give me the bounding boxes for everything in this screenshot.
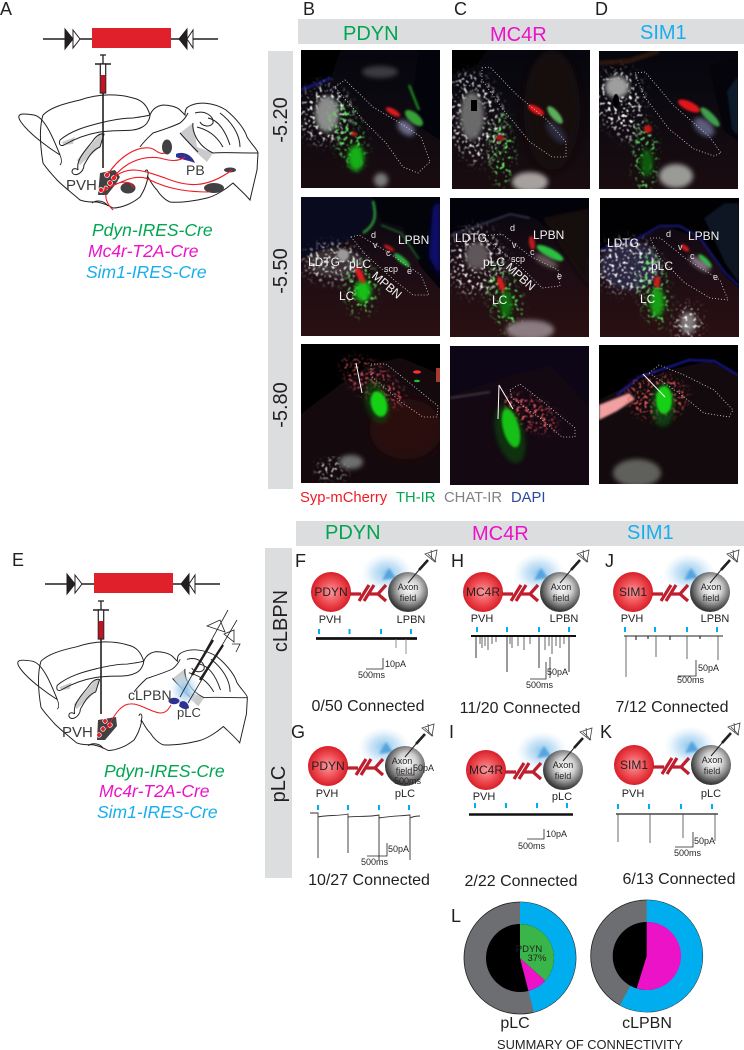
donut chart pLC	[464, 902, 576, 1014]
labels D -5.50: c	[690, 251, 695, 261]
legend: stain colours: TH-IR	[396, 490, 435, 506]
legend: stain colours: DAPI	[511, 490, 546, 506]
circuit labels I: pLC	[552, 791, 572, 803]
letter I: I	[449, 722, 454, 742]
scale bar I: 10pA	[546, 829, 567, 839]
trace F	[316, 637, 417, 640]
result K: 6/13 Connected	[623, 871, 735, 888]
labels B -5.50: e	[407, 266, 412, 276]
labels B -5.50: MPBN	[369, 269, 405, 302]
micrograph B -5.80	[301, 344, 440, 483]
panel J	[605, 550, 739, 716]
circuit labels G: Axon	[392, 756, 412, 766]
labels B -5.50: LC	[339, 289, 355, 303]
panel H	[451, 550, 589, 717]
side bar with target regions: cLBPN	[270, 590, 292, 652]
scale bar J	[677, 660, 719, 685]
icon: viral cassette E	[45, 573, 220, 594]
circuit labels I: field	[555, 771, 571, 781]
labels C -5.50: LDTG	[455, 231, 487, 245]
labels C -5.50: d	[510, 223, 515, 233]
trace J	[624, 636, 723, 640]
scale bar J: 50pA	[698, 663, 719, 673]
scale bar K: 50pA	[694, 836, 715, 846]
side bar with bregma levels: -5.80	[270, 382, 292, 428]
light pulses K	[617, 804, 713, 809]
result J: 7/12 Connected	[616, 699, 728, 716]
genotypes A: Sim1-IRES-Cre	[86, 262, 207, 282]
header bar top: MC4R	[490, 24, 547, 46]
labels B -5.50: scp	[384, 264, 398, 274]
header bar bottom: SIM1	[627, 522, 674, 544]
letter K: K	[600, 722, 612, 742]
circuit diagram K	[614, 723, 740, 785]
micrograph D -5.50	[596, 198, 739, 341]
panel K	[600, 722, 740, 888]
result G: 10/27 Connected	[308, 872, 430, 889]
trace H	[471, 636, 576, 672]
micrograph D -5.80	[599, 345, 738, 484]
scale bar I: 500ms	[518, 841, 546, 851]
circuit labels F: PVH	[319, 614, 341, 626]
circuit labels I: MC4R	[469, 763, 503, 777]
scale bar I	[518, 829, 567, 851]
header bar top	[298, 19, 744, 46]
donut labels: pLC	[500, 1015, 530, 1032]
blue light glow E	[170, 673, 200, 707]
header bar top: PDYN	[343, 23, 399, 45]
legend: stain colours: Syp-mCherry	[300, 490, 388, 506]
circuit labels H: MC4R	[466, 585, 500, 599]
circuit labels G: 500ms	[394, 776, 422, 786]
labels C -5.50: v	[512, 240, 517, 250]
labels B -5.50: d	[371, 230, 376, 240]
labels B -5.50: pLC	[349, 257, 371, 271]
scale bar G	[361, 843, 409, 867]
letter L: L	[451, 906, 461, 926]
panel: A viral injection schematic	[0, 0, 258, 282]
light pulses H	[476, 627, 570, 632]
circuit labels J	[619, 582, 729, 625]
header bar bottom: MC4R	[472, 523, 529, 545]
labels E: cLPBN	[128, 687, 172, 703]
circuit diagram G	[308, 724, 434, 786]
circuit labels J: PVH	[621, 613, 643, 625]
labels E: PVH	[62, 724, 93, 741]
icon: syringe E	[93, 601, 109, 714]
donut chart pLC: PDYN	[516, 944, 542, 955]
circuit labels G: PDYN	[311, 759, 345, 773]
scale bar J: 500ms	[677, 675, 705, 685]
scale bar K: 500ms	[674, 848, 702, 858]
trace K	[616, 813, 718, 815]
labels D -5.50: LC	[640, 292, 656, 306]
panel I	[449, 722, 592, 890]
circuit labels H: LPBN	[550, 613, 578, 625]
side bar with bregma levels: -5.50	[270, 248, 292, 294]
labels D -5.50	[607, 229, 719, 306]
labels D -5.50: d	[666, 229, 671, 239]
header letters B C D	[303, 0, 608, 19]
labels D -5.50: pLC	[651, 259, 673, 273]
circuit labels K: Axon	[702, 755, 722, 765]
circuit labels G: pLC	[395, 788, 415, 800]
trace G	[310, 813, 420, 860]
labels B -5.50: LDTG	[308, 255, 340, 269]
micrograph D -5.20	[599, 51, 738, 189]
genotypes E: Mc4r-T2A-Cre	[99, 781, 210, 801]
light pulses G	[317, 805, 410, 810]
circuit diagram J	[613, 550, 739, 612]
donut labels	[500, 1015, 672, 1032]
axons A	[103, 148, 232, 210]
label PB: PB	[186, 162, 205, 178]
icon: syringe A	[95, 55, 111, 168]
circuit diagram F	[311, 550, 437, 612]
circuit labels F: LPBN	[397, 614, 425, 626]
cLPBN and pLC nuclei	[168, 698, 189, 709]
labels C -5.50: e	[557, 271, 562, 281]
legend: stain colours: CHAT-IR	[444, 490, 502, 506]
header bar bottom	[296, 521, 744, 546]
circuit labels J: Axon	[701, 582, 721, 592]
letter G: G	[291, 722, 305, 742]
circuit labels H: field	[553, 593, 569, 603]
circuit labels F: field	[400, 593, 416, 603]
label PVH A: PVH	[66, 177, 97, 194]
scale bar H	[526, 657, 568, 690]
panel G	[291, 722, 434, 889]
circuit labels F: Axon	[398, 582, 418, 592]
donut labels: cLPBN	[622, 1015, 672, 1032]
icon: viral cassette A	[43, 28, 218, 49]
scale bar H: 50pA	[547, 667, 568, 677]
micrograph C -5.80	[450, 346, 589, 485]
target nuclei A	[120, 140, 236, 194]
labels E	[62, 687, 201, 741]
axon E	[106, 704, 171, 729]
circuit labels K: field	[704, 766, 720, 776]
circuit labels H: Axon	[551, 582, 571, 592]
mouse brain sagittal E	[18, 642, 247, 750]
genotypes E	[97, 761, 225, 822]
circuit labels G: 50pA	[413, 763, 434, 773]
scale bar F: 500ms	[358, 670, 386, 680]
circuit labels K	[620, 755, 722, 800]
circuit labels K: SIM1	[620, 758, 648, 772]
scale bar F	[358, 658, 406, 680]
circuit labels J: LPBN	[701, 613, 729, 625]
circuit labels H	[466, 582, 578, 625]
PVH nucleus A	[98, 170, 120, 195]
circuit labels G: PVH	[316, 788, 338, 800]
recording pipettes	[180, 610, 240, 703]
genotypes A: Mc4r-T2A-Cre	[88, 241, 199, 261]
micrograph B -5.50	[301, 197, 440, 336]
result F: 0/50 Connected	[312, 698, 424, 715]
circuit labels I	[469, 760, 573, 803]
panel: E recording schematic	[12, 550, 247, 822]
labels B -5.50: c	[386, 248, 391, 258]
genotypes A	[86, 220, 213, 282]
side bar with bregma levels: -5.20	[270, 97, 292, 143]
scale bar K	[674, 832, 715, 858]
labels C -5.50: MPBN	[503, 260, 538, 293]
side bar with target regions: pLC	[268, 766, 290, 802]
side bar with target regions	[265, 548, 292, 878]
micrograph C -5.20	[452, 50, 590, 189]
labels D -5.50: e	[713, 272, 718, 282]
circuit labels H: PVH	[471, 613, 493, 625]
labels B -5.50: LPBN	[398, 233, 429, 247]
micrograph C -5.50	[449, 198, 589, 340]
genotypes A: Pdyn-IRES-Cre	[92, 220, 213, 240]
header bar top: SIM1	[640, 22, 687, 44]
labels C -5.50: LPBN	[533, 228, 564, 242]
circuit labels F	[314, 582, 425, 626]
panel L: summary of connectivity	[451, 900, 703, 1050]
circuit labels K: pLC	[701, 788, 721, 800]
light pulses I	[474, 803, 568, 808]
result H: 11/20 Connected	[460, 700, 580, 717]
letter J: J	[605, 551, 614, 571]
labels C -5.50	[455, 223, 564, 307]
donut chart pLC: 37%	[527, 953, 547, 964]
side bar with bregma levels	[268, 51, 293, 489]
scale bar G: 50pA	[388, 844, 409, 854]
labels E: pLC	[177, 705, 201, 720]
light pulses J	[624, 627, 718, 632]
labels C -5.50: c	[530, 247, 535, 257]
panel F	[295, 550, 437, 715]
labels D -5.50: LDTG	[607, 236, 639, 250]
circuit labels G	[311, 756, 434, 800]
legend: stain colours	[300, 490, 546, 506]
micrograph B -5.20	[301, 50, 440, 188]
genotypes E: Pdyn-IRES-Cre	[104, 761, 225, 781]
labels C -5.50: LC	[492, 293, 508, 307]
result I: 2/22 Connected	[465, 873, 577, 890]
PB nucleus A	[176, 153, 195, 163]
labels B -5.50: v	[373, 240, 378, 250]
circuit labels J: field	[703, 593, 719, 603]
genotypes E: Sim1-IRES-Cre	[97, 802, 218, 822]
scale bar G: 500ms	[361, 857, 389, 867]
labels D -5.50: v	[678, 242, 683, 252]
donut chart cLPBN	[591, 900, 703, 1012]
letter H: H	[451, 551, 464, 571]
labels C -5.50: scp	[511, 254, 525, 264]
circuit labels J: SIM1	[619, 585, 647, 599]
light pulses F	[318, 629, 412, 634]
mouse brain sagittal A	[19, 95, 258, 208]
letter F: F	[295, 551, 306, 571]
circuit labels G: field	[396, 766, 412, 776]
circuit diagram H	[463, 550, 589, 612]
circuit labels K: PVH	[622, 788, 644, 800]
scale bar H: 500ms	[526, 680, 554, 690]
scale bar F: 10pA	[385, 659, 406, 669]
panel letter E: E	[12, 550, 24, 570]
labels B -5.50	[308, 230, 429, 303]
labels C -5.50: pLC	[483, 255, 505, 269]
circuit labels I: PVH	[473, 791, 495, 803]
circuit diagram I	[466, 728, 592, 790]
PVH nucleus E	[97, 717, 117, 740]
circuit labels I: Axon	[553, 760, 573, 770]
circuit labels F: PDYN	[314, 585, 348, 599]
trace I	[469, 813, 573, 816]
header bar bottom: PDYN	[325, 522, 381, 544]
labels D -5.50: LPBN	[688, 229, 719, 243]
